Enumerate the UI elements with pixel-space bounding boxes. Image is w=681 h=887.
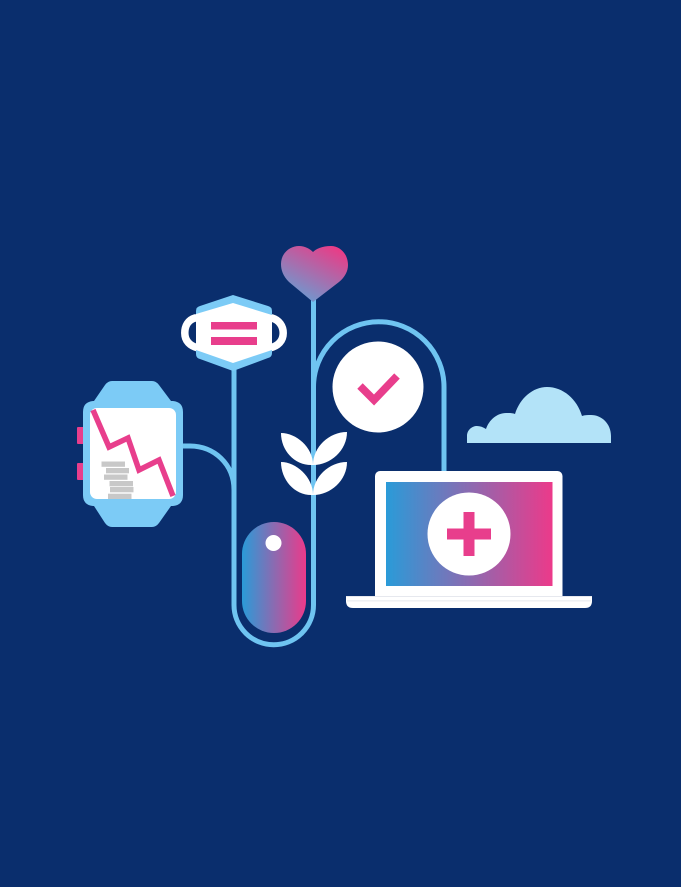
mask pleats: [211, 322, 257, 345]
medical cross: [447, 512, 491, 556]
icon: face mask: [185, 295, 283, 371]
icon: plant leaves: [281, 432, 347, 495]
mask ear loops: [185, 318, 283, 348]
watch screen: [90, 408, 176, 499]
watch side buttons: [77, 427, 84, 480]
medical cross badge: [428, 492, 510, 576]
mask inner panel: [196, 303, 272, 363]
watch case and straps: [83, 381, 183, 527]
connector lines: [183, 298, 444, 645]
falling chart line: [93, 410, 173, 496]
coin stack: [102, 462, 134, 499]
mask outer shape: [196, 295, 272, 371]
icon: capsule: [242, 522, 306, 633]
icon: heart: [281, 246, 348, 302]
icon: check badge: [332, 342, 424, 432]
icon: smartwatch: [77, 381, 183, 527]
capsule body: [242, 522, 306, 633]
badge circle: [332, 342, 424, 432]
check mark: [360, 376, 397, 400]
laptop screen: [386, 482, 552, 586]
capsule highlight: [266, 535, 282, 551]
icon: cloud: [467, 387, 611, 443]
laptop lid: [375, 471, 562, 601]
laptop base: [346, 596, 592, 608]
icon: laptop: [346, 471, 592, 608]
